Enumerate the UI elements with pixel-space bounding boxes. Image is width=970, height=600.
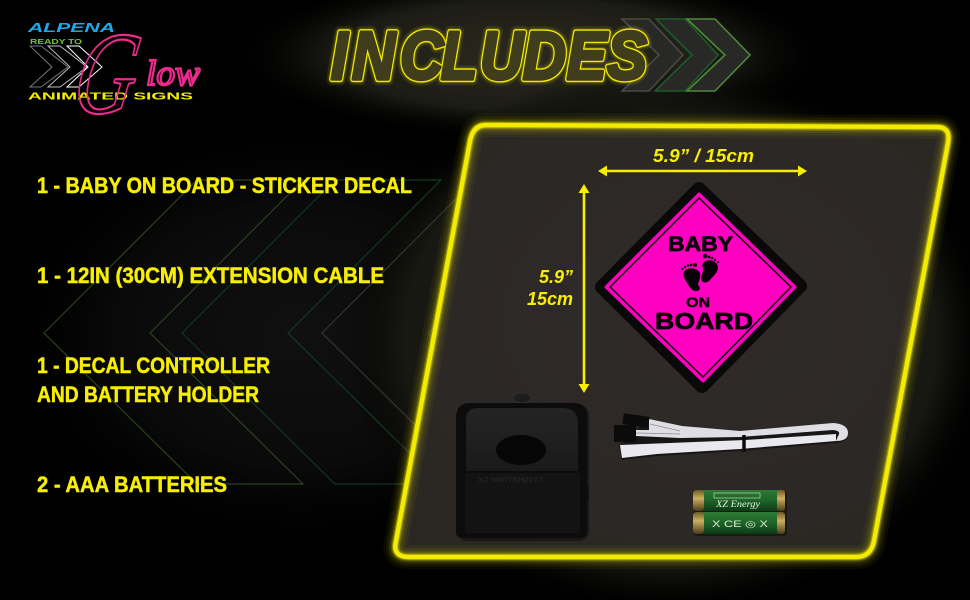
- decal text: board: BOARD: [655, 308, 753, 334]
- controller top face: [466, 408, 578, 471]
- extension cable: [614, 413, 848, 460]
- horizontal dimension: [598, 146, 807, 176]
- decal pink border: [606, 194, 795, 381]
- height label: [527, 267, 573, 309]
- height label: 15cm: [527, 289, 573, 309]
- item: batteries: 2 - AAA BATTERIES: [37, 472, 227, 497]
- battery one: XZ Energy: [715, 499, 760, 509]
- item: extension cable: 1 - 12IN (30CM) EXTENSION CABLE: [37, 263, 384, 288]
- controller oval: [496, 435, 546, 465]
- AAA batteries: [693, 490, 787, 536]
- title: INCLUDES: [331, 17, 647, 94]
- neon border glow: [395, 125, 949, 557]
- baby on board decal: [602, 189, 800, 386]
- item: decal controller: 1 - DECAL CONTROLLER: [37, 353, 270, 378]
- ribbon shadow: [619, 419, 848, 460]
- width label: 5.9” / 15cm: [653, 146, 754, 166]
- logo: ready to: READY TO: [30, 37, 82, 46]
- controller tab: [513, 393, 531, 403]
- title: INCLUDES: [331, 17, 647, 94]
- decal text: baby: BABY: [668, 233, 733, 256]
- title chevrons: [622, 19, 750, 91]
- decal black backing: [602, 189, 800, 386]
- neon border: [395, 125, 949, 557]
- vertical dimension: [527, 184, 590, 393]
- title: INCLUDES: [331, 17, 647, 94]
- height arrow: [578, 184, 590, 393]
- controller embossed label: XZ NWITSH20TX: [478, 477, 544, 484]
- ribbon upper band: [636, 419, 848, 441]
- height label: 5.9”: [539, 267, 573, 287]
- panel: product contents: [395, 125, 949, 557]
- width arrow: [598, 166, 807, 176]
- item: sticker decal: 1 - BABY ON BOARD - STICKER DECAL: [37, 173, 412, 198]
- controller shadow: [457, 405, 589, 541]
- panel fill: [395, 125, 949, 557]
- logo: [26, 8, 200, 139]
- title: INCLUDES: [331, 17, 647, 94]
- list of included items: [37, 173, 412, 497]
- logo: glow script: [65, 8, 200, 139]
- ribbon wire lines: [636, 424, 680, 434]
- item: decal controller: [37, 353, 270, 407]
- logo: glow script: low: [146, 53, 200, 93]
- controller and battery holder: [456, 393, 589, 541]
- battery two: X CE ◎ X: [712, 519, 768, 529]
- controller lower face: [465, 473, 580, 533]
- decal inner line: [610, 198, 791, 377]
- battery shadow: [694, 491, 787, 536]
- ribbon lower band: [620, 434, 836, 458]
- connector plugs: [622, 413, 650, 428]
- logo: Alpena wordmark: ALPENA: [26, 21, 115, 35]
- logo: glow script: G: [65, 8, 150, 139]
- background chevrons: [44, 180, 581, 484]
- controller nub: [585, 486, 589, 502]
- cable tie: [742, 435, 746, 452]
- controller body: [456, 403, 587, 538]
- logo: animated signs: ANIMATED SIGNS: [28, 90, 193, 102]
- decal text: on: ON: [686, 294, 710, 310]
- logo: chevrons: [30, 46, 102, 87]
- item: decal controller: AND BATTERY HOLDER: [37, 382, 259, 407]
- icon: baby feet: [681, 254, 719, 291]
